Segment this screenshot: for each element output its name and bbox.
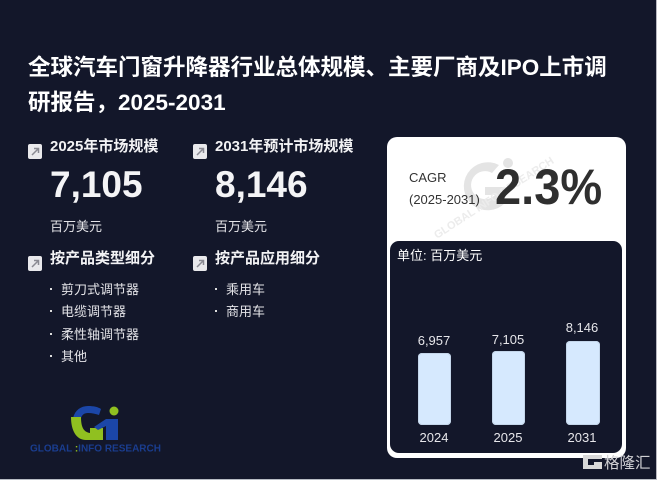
list <box>215 282 265 319</box>
title <box>28 55 607 115</box>
chart unit: 单位: 百万美元 <box>397 248 482 263</box>
panel: 2025 market size <box>28 138 158 234</box>
list <box>50 282 139 364</box>
watermark: Gelonghui <box>583 454 651 472</box>
bar: 2031: 2031 <box>568 430 596 445</box>
heading: 2025年市场规模 <box>50 138 158 155</box>
logo: Global Info Research <box>30 406 161 454</box>
CAGR label: CAGR <box>409 170 447 185</box>
bar: 2024 <box>418 333 451 445</box>
bar: 2024: 6,957 <box>418 333 450 348</box>
unit: 百万美元 <box>215 219 267 234</box>
bar: 2031: 8,146 <box>566 320 598 335</box>
icon: arrow <box>28 144 42 159</box>
heading: 按产品类型细分 <box>50 250 155 267</box>
value: 8,146 <box>215 164 308 205</box>
icon: arrow <box>193 144 207 159</box>
CAGR value: 2.3% <box>495 159 602 215</box>
icon: G mark <box>583 455 602 469</box>
icon: arrow <box>28 256 42 271</box>
bar: 2031 <box>566 320 600 445</box>
panel: by product type <box>28 250 155 364</box>
bar: 2025: 2025 <box>494 430 522 445</box>
list: 剪刀式调节器 <box>61 282 139 297</box>
panel: by application <box>193 250 320 319</box>
heading: 按产品应用细分 <box>215 250 320 267</box>
bar: 2025: 7,105 <box>492 332 524 347</box>
title: 全球汽车门窗升降器行业总体规模、主要厂商及IPO上市调 <box>28 55 607 80</box>
panel: bar chart <box>390 241 622 453</box>
list: 柔性轴调节器 <box>61 327 139 342</box>
bar: 2024: 2024 <box>420 430 448 445</box>
icon: arrow <box>193 256 207 271</box>
list: 商用车 <box>226 304 265 319</box>
panel: CAGR card <box>387 137 626 458</box>
heading: 2031年预计市场规模 <box>215 138 353 155</box>
panel: 2031 market size <box>193 138 353 234</box>
title: 研报告，2025-2031 <box>28 90 226 115</box>
list: 乘用车 <box>226 282 265 297</box>
brand text: 格隆汇 <box>604 455 651 472</box>
CAGR label: (2025-2031) <box>409 192 480 207</box>
value: 7,105 <box>50 164 143 205</box>
list: 其他 <box>61 349 87 364</box>
CAGR label <box>409 170 480 207</box>
unit: 百万美元 <box>50 219 102 234</box>
list: 电缆调节器 <box>61 304 126 319</box>
watermark: GLOBAL INFO RESEARCH <box>432 155 556 242</box>
bar: 2025 <box>492 332 525 445</box>
